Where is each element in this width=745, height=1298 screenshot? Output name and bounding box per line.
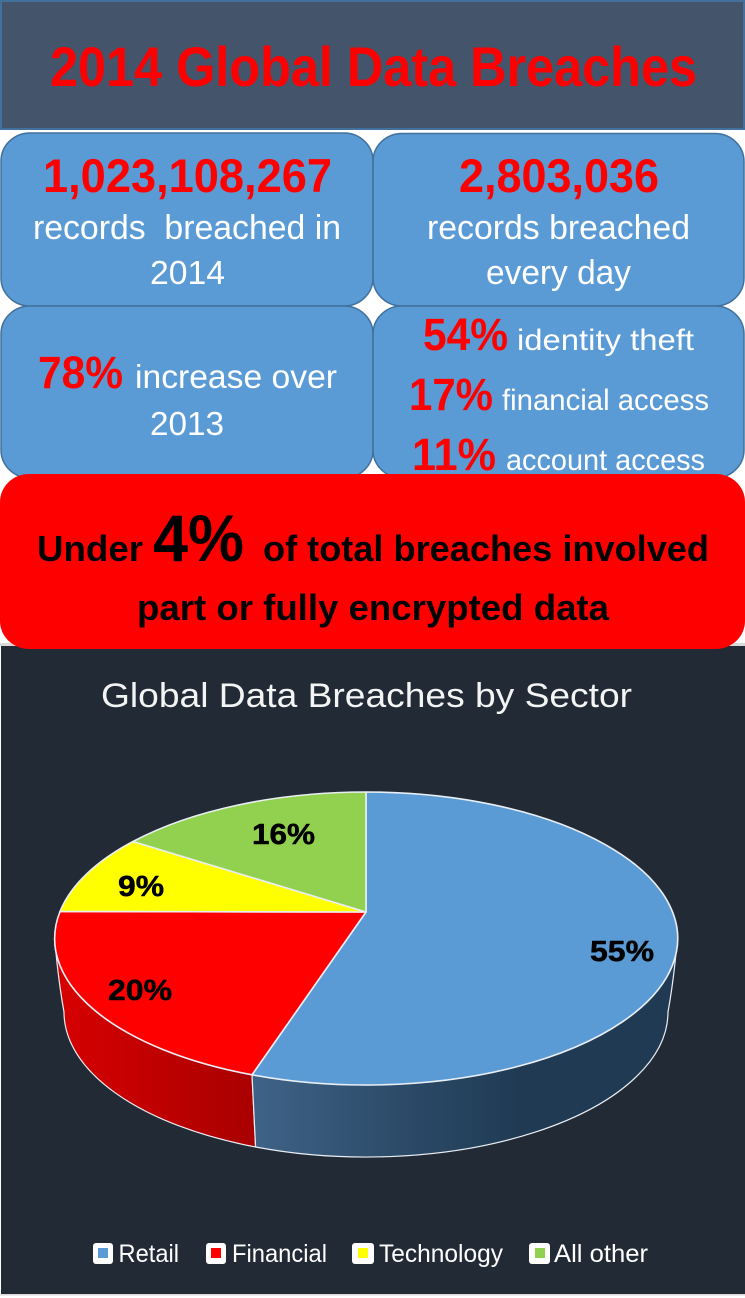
light rule above chart panel <box>0 643 745 646</box>
row: financial access: 17% <box>409 369 493 420</box>
legend item: financial: Financial <box>232 1240 327 1268</box>
panel: breach types <box>373 306 744 480</box>
callout text line 1: of total breaches involved <box>263 528 709 569</box>
pie side: retail <box>252 938 678 1157</box>
row: account access: 11% <box>412 429 496 480</box>
caption: increase over 2013 <box>135 358 337 442</box>
stat: total records: 1,023,108,267 <box>43 149 332 202</box>
caption: increase over 2013: 2013 <box>150 405 224 442</box>
row: identity theft: 54% <box>423 309 508 360</box>
callout text line 2: part or fully encrypted data <box>137 587 610 628</box>
row: account access: account access <box>506 444 705 477</box>
legend item: technology: Technology <box>379 1240 503 1268</box>
row: identity theft: identity theft <box>517 324 695 357</box>
row: financial access: financial access <box>502 384 709 417</box>
row: account access <box>412 429 705 480</box>
label: 20%: 20% <box>108 975 172 1007</box>
row: financial access <box>409 369 709 420</box>
pie side: financial <box>54 938 256 1147</box>
stat: 78 percent: 78% <box>38 347 123 398</box>
legend item: all other: All other <box>554 1240 648 1268</box>
chart title: Global Data Breaches by Sector <box>101 677 632 715</box>
label: 55%: 55% <box>590 936 654 968</box>
callout: encrypted data <box>0 474 745 649</box>
title banner <box>1 1 744 129</box>
row: identity theft <box>423 309 695 360</box>
label: 16%: 16% <box>252 819 315 851</box>
light rule below chart panel <box>0 1294 745 1296</box>
callout text line 1: Under <box>37 528 143 569</box>
caption: daily records <box>427 209 690 292</box>
legend item: retail <box>93 1240 179 1268</box>
callout text line 1: 4% <box>153 501 244 575</box>
3D pie chart <box>54 792 678 1157</box>
stat: daily records: 2,803,036 <box>459 149 659 202</box>
caption: total records: 2014 <box>150 254 225 291</box>
caption: daily records: every day <box>486 254 631 292</box>
slice: retail 55% <box>252 792 678 1085</box>
legend <box>93 1240 648 1268</box>
panel: chart background <box>1 646 745 1294</box>
slice: all other 16% <box>133 792 366 912</box>
legend item: retail: Retail <box>118 1240 179 1268</box>
caption: daily records: records breached <box>427 209 690 247</box>
slice: technology 9% <box>60 842 366 912</box>
callout text line 1 <box>37 501 709 575</box>
label: 9%: 9% <box>118 871 164 903</box>
caption: increase over 2013: increase over <box>135 358 337 395</box>
panel: increase over 2013 <box>1 306 373 478</box>
panel: records breached in 2014 <box>1 133 373 306</box>
panel: records breached every day <box>373 134 744 306</box>
caption: total records <box>33 209 341 291</box>
caption: total records: records breached in <box>33 209 341 247</box>
slice: financial 20% <box>55 912 366 1075</box>
